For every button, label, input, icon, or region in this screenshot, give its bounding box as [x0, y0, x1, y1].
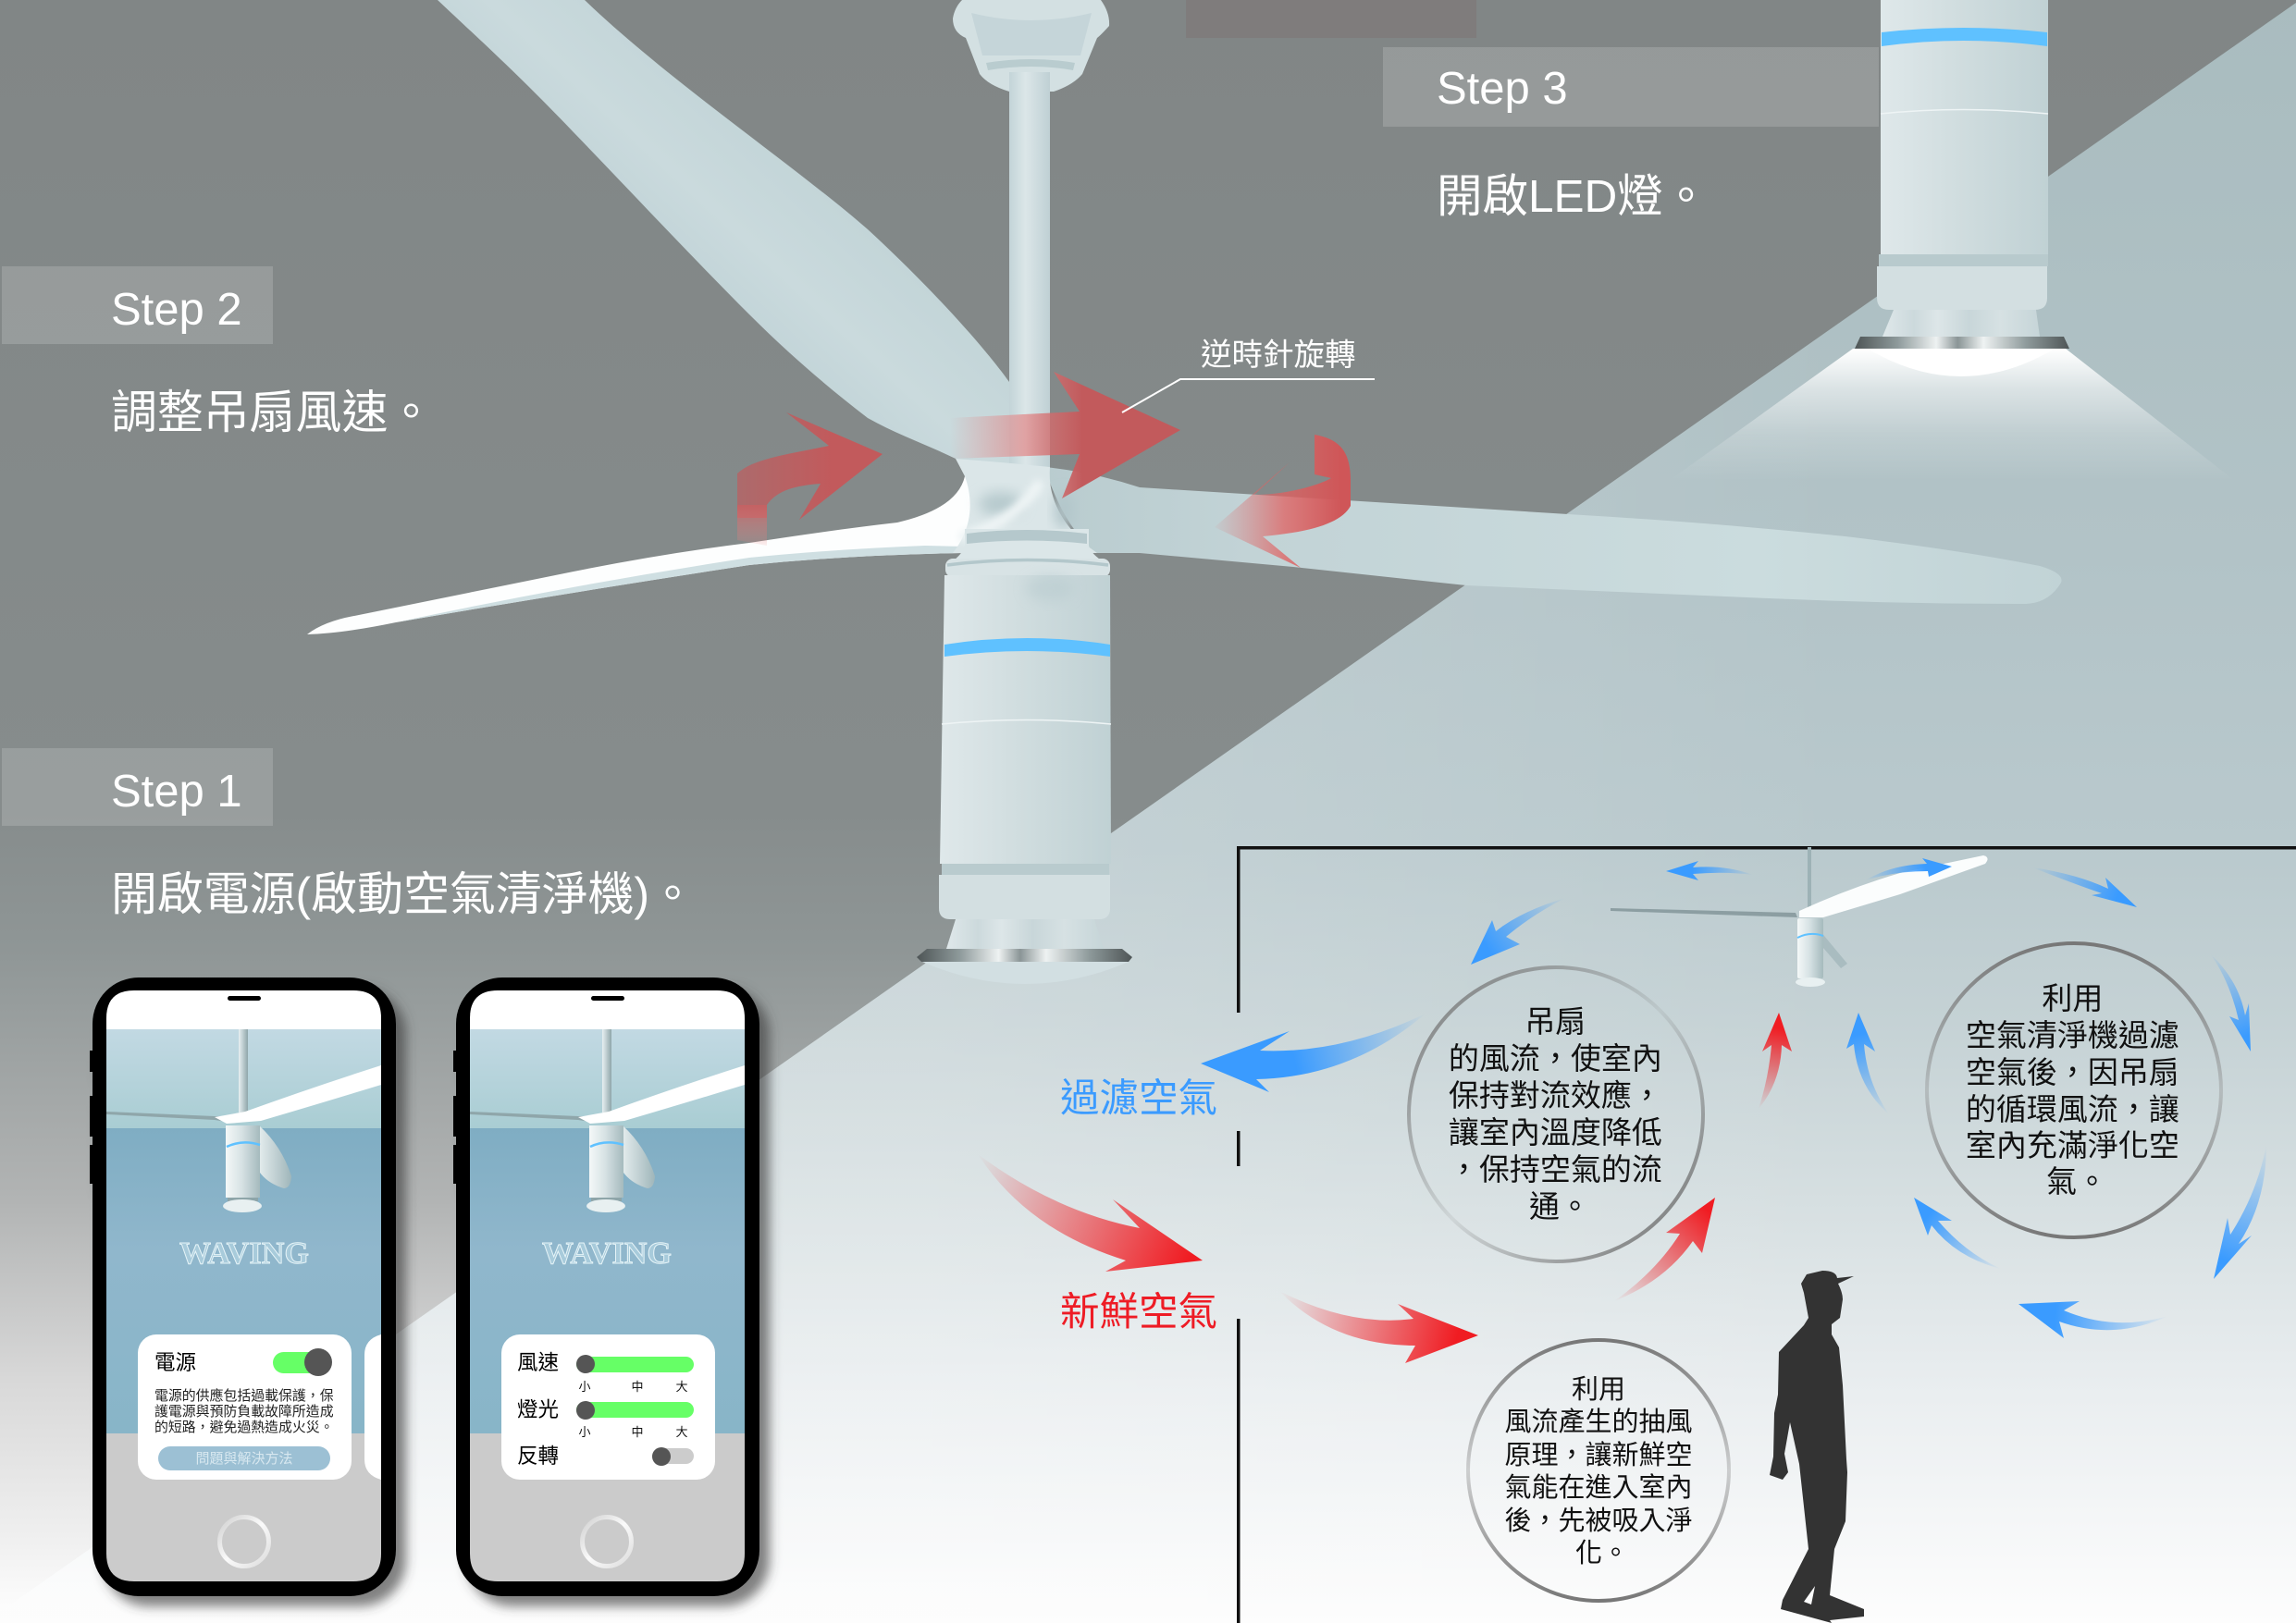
card: sliders	[501, 1334, 715, 1480]
card: sliders: 中	[631, 1425, 644, 1439]
screen	[106, 990, 381, 1581]
rotation arrow: left	[737, 412, 883, 546]
step 3 label	[1383, 47, 1879, 127]
rotation arrow: centre	[950, 372, 1180, 498]
circle: fan airflow: 保持對流效應，	[1449, 1078, 1662, 1113]
home button	[220, 1517, 268, 1567]
circle: purified circulation: 利用	[2042, 981, 2103, 1015]
person silhouette	[1770, 1271, 1864, 1623]
card: power toggle: 的短路，避免過熱造成火災。	[154, 1420, 334, 1435]
mini fan	[106, 1029, 381, 1212]
card: sliders: 中	[631, 1380, 644, 1394]
ceiling mount	[953, 0, 1109, 92]
circle: fresh air intake: 原理，讓新鮮空	[1504, 1440, 1692, 1470]
room section frame	[1237, 846, 2296, 1623]
circle: fan airflow: 通。	[1529, 1189, 1590, 1223]
circle: fan airflow: ，保持空氣的流	[1449, 1152, 1662, 1187]
card: power toggle: 電源	[154, 1351, 196, 1374]
arrow: upper left	[1471, 898, 1565, 965]
circle: fan airflow	[1409, 967, 1703, 1261]
card: sliders: 大	[675, 1425, 688, 1439]
red airflow arrows	[1279, 1013, 1792, 1363]
circle: purified circulation: 室內充滿淨化空	[1966, 1128, 2179, 1162]
card: sliders: 燈光	[517, 1398, 559, 1421]
screen	[470, 990, 745, 1581]
circle: purified circulation: 氣。	[2046, 1164, 2107, 1199]
arrow: lower right	[2214, 1145, 2266, 1279]
card: sliders: 大	[675, 1380, 688, 1394]
circle: purified circulation: 的循環風流，讓	[1966, 1092, 2179, 1126]
circle: fresh air intake	[1468, 1340, 1729, 1601]
step 2 label	[2, 266, 273, 344]
step 1 label	[2, 748, 273, 826]
brand wordmark: WAVING	[542, 1236, 672, 1271]
callout: counter-clockwise rotation: 逆時針旋轉	[1201, 338, 1356, 373]
arrow: toward circle	[1614, 1198, 1715, 1301]
next card peek	[364, 1334, 381, 1480]
step 1 label: Step 1	[111, 767, 242, 817]
phone frame	[453, 977, 759, 1596]
phone: control screen	[453, 977, 759, 1596]
card: power toggle	[138, 1334, 352, 1480]
step 3 description: 開啟LED燈。	[1437, 171, 1709, 222]
arrow: right side	[2210, 953, 2251, 1051]
arrow: top right	[1865, 858, 1952, 880]
circle: fresh air intake: 氣能在進入室內	[1504, 1472, 1692, 1503]
main ceiling fan	[307, 0, 2062, 984]
fan blade: left	[307, 476, 1004, 634]
arrow: bottom right	[2018, 1301, 2168, 1338]
arrow: returning	[1914, 1198, 2001, 1269]
hub	[953, 459, 1097, 553]
circle: purified circulation	[1927, 943, 2221, 1237]
rotation arrow: right	[1215, 435, 1351, 568]
motor body	[917, 529, 1132, 984]
card: power toggle: 問題與解決方法	[195, 1451, 293, 1467]
circle: fan airflow: 吊扇	[1524, 1004, 1586, 1039]
circle: fresh air intake: 利用	[1572, 1374, 1625, 1405]
brand wordmark: WAVING	[179, 1236, 309, 1271]
label: filtered air: 過濾空氣	[1060, 1077, 1217, 1121]
card: sliders: 小	[578, 1380, 591, 1394]
callout: counter-clockwise rotation	[1122, 338, 1375, 412]
light cone under the top-right fan	[1669, 349, 2235, 481]
arrow: top left	[1666, 861, 1753, 880]
circle: purified circulation: 空氣後，因吊扇	[1966, 1055, 2179, 1089]
arrow: upper right	[2032, 867, 2137, 907]
circle: fresh air intake: 後，先被吸入淨	[1504, 1506, 1692, 1536]
circle: purified circulation: 空氣清淨機過濾	[1966, 1018, 2179, 1052]
phone: power screen	[90, 977, 396, 1596]
fan blade: top	[438, 0, 1044, 481]
circle: fresh air intake: 化。	[1575, 1538, 1629, 1568]
step 2 description: 調整吊扇風速。	[111, 387, 434, 438]
label: fresh air: 新鮮空氣	[1060, 1291, 1217, 1334]
card: sliders: 反轉	[517, 1445, 559, 1468]
blue airflow arrows	[1201, 858, 2266, 1338]
circle: fan airflow: 讓室內溫度降低	[1449, 1115, 1662, 1150]
mini fan	[470, 1029, 745, 1212]
circle: fresh air intake: 風流產生的抽風	[1504, 1407, 1692, 1437]
card: power toggle: 電源的供應包括過載保護，保	[154, 1387, 334, 1404]
step 2 label: Step 2	[111, 285, 242, 335]
down rod	[1009, 72, 1050, 479]
arrow: up into fan	[1846, 1013, 1889, 1114]
step 3 label: Step 3	[1437, 64, 1568, 114]
card: sliders: 小	[578, 1425, 591, 1439]
arrow: fresh air into room	[1279, 1291, 1478, 1363]
fan detail: LED lamp close-up	[1855, 0, 2069, 376]
arrow: fresh air incoming	[978, 1154, 1203, 1272]
phone frame	[90, 977, 396, 1596]
card: power toggle: 護電源與預防負載故障所造成	[154, 1403, 334, 1420]
arrow: filtered air out	[1201, 1014, 1426, 1092]
step 1 description: 開啟電源(啟動空氣清淨機)。	[111, 868, 696, 920]
fan blade: right	[1044, 467, 2062, 604]
circle: fan airflow: 的風流，使室內	[1449, 1041, 1662, 1076]
home button	[583, 1517, 631, 1567]
card: sliders: 風速	[517, 1351, 559, 1374]
small fan in room	[1611, 847, 1988, 987]
arrow: up into fan	[1759, 1013, 1792, 1109]
